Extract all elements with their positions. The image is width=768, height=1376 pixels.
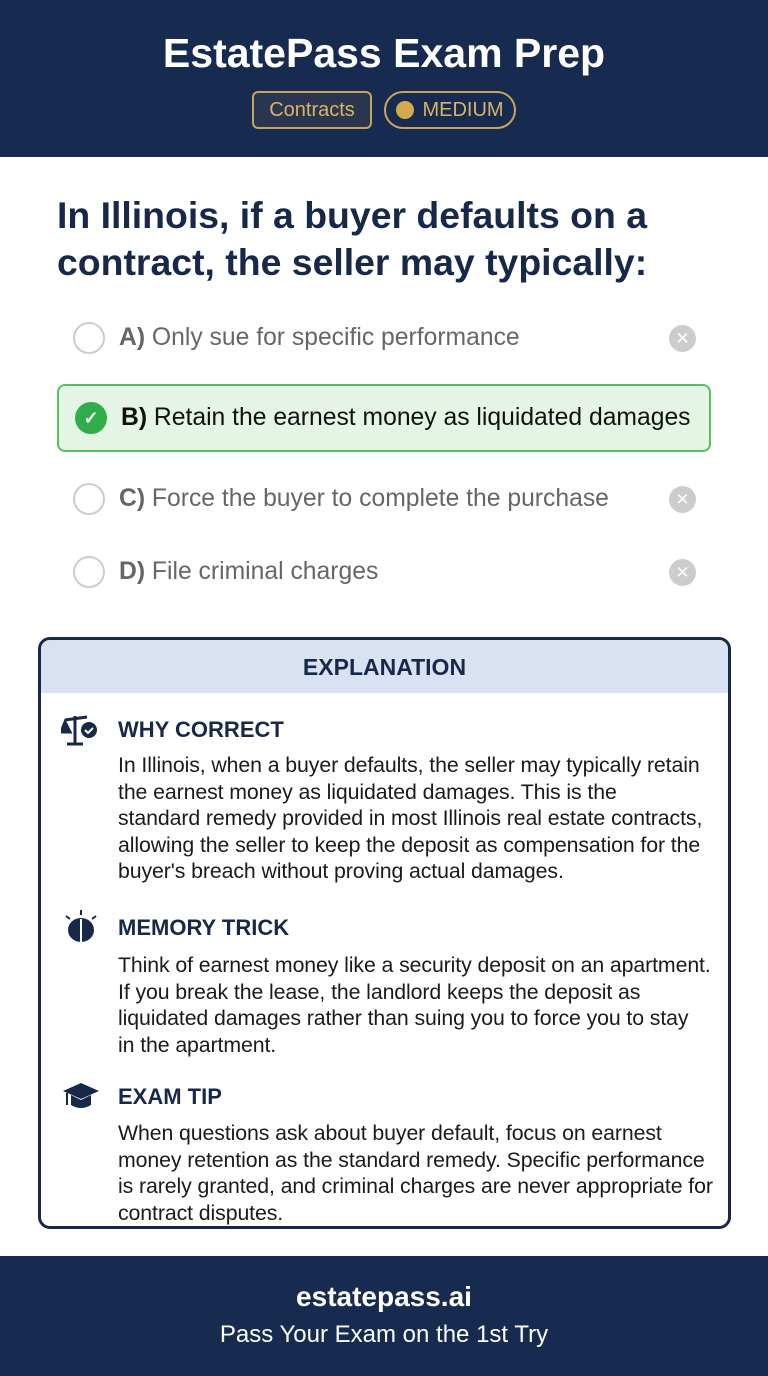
text: why correct: the earnest money as liquidated damages. This is the: [118, 780, 617, 804]
option C: [73, 483, 696, 515]
text: exam tip: is rarely granted, and criminal charges are never appropriate for: [118, 1174, 713, 1198]
title: EstatePass Exam Prep: [163, 30, 605, 76]
text: why correct: allowing the seller to keep the deposit as compensation for the: [118, 833, 700, 857]
text: why correct: In Illinois, when a buyer defaults, the seller may typically retain: [118, 753, 700, 777]
text: exam tip: When questions ask about buyer default, focus on earnest: [118, 1121, 662, 1145]
text: exam tip: contract disputes.: [118, 1201, 283, 1225]
option D: D) File criminal charges: [119, 558, 378, 585]
question: [57, 194, 648, 283]
question: contract, the seller may typically:: [57, 241, 647, 283]
text: why correct: [118, 753, 702, 883]
option D: ✕: [675, 563, 690, 582]
text: memory trick: If you break the lease, the landlord keeps the deposit as: [118, 980, 640, 1004]
icon: grad cap: [63, 1083, 99, 1108]
explanation heading: EXPLANATION: [303, 654, 466, 680]
explanation heading: [41, 640, 728, 693]
icon: brain: [66, 910, 96, 942]
option B correct: B) Retain the earnest money as liquidated damages: [121, 404, 691, 431]
text: why correct: buyer's breach without proving actual damages.: [118, 859, 564, 883]
icon: scales: [61, 716, 97, 746]
footer url: estatepass.ai: [296, 1281, 472, 1312]
footer: [0, 1256, 768, 1376]
heading: memory trick: MEMORY TRICK: [118, 915, 289, 940]
header: [0, 0, 768, 157]
option B correct: ✓: [83, 408, 99, 428]
option D: [73, 556, 696, 588]
option A: A) Only sue for specific performance: [119, 324, 520, 351]
badge: MEDIUM: [384, 91, 516, 129]
option C: ✕: [675, 490, 690, 509]
option B correct: [57, 384, 711, 452]
text: memory trick: [118, 953, 711, 1057]
text: why correct: standard remedy provided in most Illinois real estate contracts,: [118, 806, 702, 830]
text: memory trick: Think of earnest money like a security deposit on an apartment.: [118, 953, 711, 977]
heading: why correct: WHY CORRECT: [118, 717, 284, 742]
heading: exam tip: EXAM TIP: [118, 1084, 222, 1109]
badge: Contracts: [252, 91, 372, 129]
footer tagline: Pass Your Exam on the 1st Try: [220, 1321, 548, 1348]
text: exam tip: money retention as the standard remedy. Specific performance: [118, 1148, 705, 1172]
question: In Illinois, if a buyer defaults on a: [57, 194, 647, 236]
text: memory trick: liquidated damages rather than suing you to force you to stay: [118, 1006, 688, 1030]
option A: [73, 322, 696, 354]
badge: Contracts: Contracts: [269, 98, 355, 120]
explanation panel: [38, 637, 731, 1229]
option C: C) Force the buyer to complete the purchase: [119, 485, 609, 512]
option A: ✕: [675, 329, 690, 348]
text: memory trick: in the apartment.: [118, 1033, 276, 1057]
text: exam tip: [118, 1121, 713, 1225]
badge: MEDIUM: MEDIUM: [422, 98, 504, 120]
